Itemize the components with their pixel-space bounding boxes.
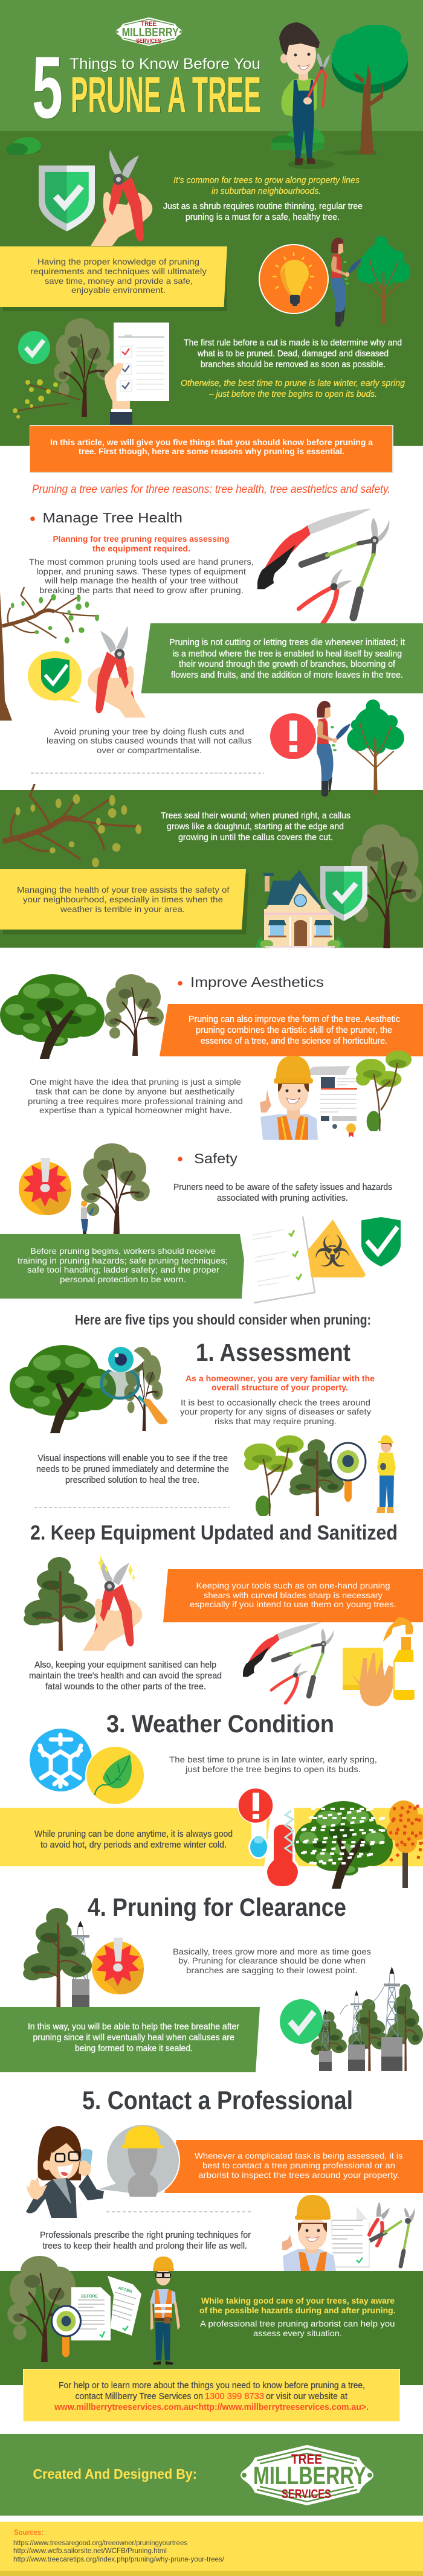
text: best time: just before the tree begins to open its buds. — [185, 1764, 361, 1774]
icon: branch with green leaves — [0, 587, 99, 721]
text: breathe: In this way, you will be able to help the tree breathe after — [28, 2022, 239, 2032]
illustration: worker in hard hat — [260, 1056, 318, 1140]
icon: magnifier with eye — [97, 1347, 167, 1424]
panel: credits — [0, 2434, 423, 2516]
text: weather band — [34, 1829, 233, 1850]
panel: weather band — [0, 1808, 423, 1866]
logo: Millberry Tree Services top — [115, 17, 182, 47]
icon: check circle 2 — [280, 1999, 323, 2044]
icon: branch with olive leaves — [3, 784, 141, 867]
text: clearance: by. Pruning for clearance should be done when — [178, 1956, 366, 1965]
text: assessment: As a homeowner, you are very familiar with the — [186, 1373, 375, 1383]
icon: before and after documents — [71, 2276, 141, 2340]
icon: before and after documents: BEFORE — [81, 2295, 98, 2299]
text: contact — [195, 2151, 402, 2180]
text: hazards: While taking good care of your trees, stay aware — [201, 2296, 395, 2305]
text: equipment: breaking the parts that need to grow after pruning. — [39, 585, 244, 595]
text: article intro: In this article, we will give you five things that you should know before pruning a — [50, 437, 373, 447]
text: expertise: pruning a tree requires more professional training and — [28, 1096, 243, 1106]
illustration: pylons and trees — [311, 1967, 423, 2071]
heading: five tips: Here are five tips you should consider when pruning: — [75, 1312, 371, 1328]
text: intro: pruning is a must for a safe, healthy tree. — [186, 212, 340, 222]
logo: Millberry Tree Services bottom: SERVICES — [282, 2487, 331, 2501]
icon: speech bubble with arborist silhouette — [95, 2124, 179, 2197]
panel: contact call to action — [23, 2369, 400, 2422]
icon: warning burst 2 — [92, 1938, 144, 1994]
icon: alert circle — [270, 713, 316, 759]
icon: biohazard sign — [308, 1219, 366, 1277]
heading: 3 weather condition: 3. Weather Condition — [106, 1710, 334, 1738]
text: expertise — [28, 1077, 243, 1115]
text: training: training in pruning hazards; safe pruning techniques; — [18, 1256, 228, 1265]
background: intro lawn — [0, 131, 423, 446]
icon: spray bottle, cloth and hand — [343, 1617, 415, 1706]
text: professionals — [40, 2230, 251, 2251]
heading: 4 pruning for clearance: 4. Pruning for Clearance — [88, 1893, 346, 1921]
background: closing hazards section — [0, 2271, 423, 2385]
text: contact details: For help or to learn more about the things you need to know before pruning a tree, — [59, 2380, 365, 2391]
text: first rule: Otherwise, the best time to prune is late winter, early spring — [181, 378, 405, 388]
logo: Millberry Tree Services top: SERVICES — [136, 38, 161, 45]
text: neighbourhood: Managing the health of your tree assists the safety of — [17, 885, 230, 895]
logo: Millberry Tree Services top: MILLBERRY — [122, 25, 179, 39]
panel: sharp tools — [163, 1569, 423, 1622]
text: assessment: your property for any signs of diseases or safety — [180, 1407, 371, 1416]
illustration: house — [256, 870, 344, 948]
text: three reasons: Pruning a tree varies for three reasons: tree health, tree aesthetics and safety. — [32, 483, 390, 496]
panel: breathe — [0, 2007, 260, 2072]
icon: olive tree safety — [81, 1143, 150, 1235]
text: trees seal: Trees seal their wound; when pruned right, a callus — [161, 811, 350, 821]
icon: oak tree — [0, 974, 105, 1059]
text: equipment: Planning for tree pruning requires assessing — [53, 534, 230, 544]
icon: autumn tree — [387, 1800, 423, 1888]
text: assessment: It is best to occasionally check the trees around — [181, 1398, 370, 1407]
text: first rule: branches should be removed as soon as possible. — [201, 359, 386, 370]
text: neighbourhood: weather is terrible in your area. — [60, 904, 185, 914]
icon: snowy tree — [294, 1801, 393, 1889]
heading: 5 contact a professional: 5. Contact a Professional — [82, 2086, 353, 2115]
text: training: personal protection to be worn. — [60, 1274, 186, 1284]
title numeral 5: 5 — [32, 38, 63, 137]
icon: sparkling pruners in hand — [83, 1558, 142, 1651]
text: best time — [169, 1755, 377, 1774]
text: training: Before pruning begins, workers should receive — [30, 1246, 216, 1256]
text: knowledge: Having the proper knowledge of pruning — [37, 257, 199, 266]
illustration: gardener with clippers — [279, 22, 335, 169]
panel: pruning explanation — [141, 623, 423, 693]
background: tree seal section — [0, 790, 423, 948]
icon: check circle — [18, 331, 50, 364]
text: article intro: tree. First though, here are some reasons why pruning is essential. — [79, 446, 344, 456]
text: clearance — [173, 1947, 371, 1975]
text: assessment: risks that may require pruning. — [215, 1416, 337, 1426]
text: weather band: to avoid hot, dry periods and extreme winter cold. — [40, 1840, 227, 1850]
text: safety intro: Pruners need to be aware of the safety issues and hazards — [173, 1182, 392, 1192]
icon: left bush — [3, 137, 41, 155]
icon: pruners and loppers — [369, 2202, 415, 2266]
text: sanitised: maintain the tree's health and can avoid the spread — [29, 1671, 222, 1681]
text: pruning explanation: flowers and fruits, and the addition of more leaves in the tree. — [171, 670, 403, 680]
text: pruning explanation: is a method where the tree is enabled to heal itself by sealing — [173, 649, 402, 659]
icon: lime tree — [356, 1050, 412, 1132]
panel: neighbourhood callout — [0, 869, 249, 934]
text: avoid flush cuts: over or compartmentalise. — [97, 745, 202, 755]
text: safety intro — [173, 1182, 392, 1203]
text: contact details: or visit our website at — [266, 2391, 348, 2401]
text: professionals: trees to keep their health and prolong their life as well. — [42, 2241, 247, 2251]
text: safety intro: associated with pruning activities. — [217, 1193, 348, 1203]
text: first rule: – just before the tree begins to open its buds. — [208, 389, 377, 399]
panel: sources — [0, 2522, 423, 2576]
heading: manage tree health: Manage Tree Health — [42, 510, 182, 525]
text: best time: The best time to prune is in late winter, early spring, — [169, 1755, 377, 1764]
text: intro — [163, 175, 363, 222]
text: avoid flush cuts: Avoid pruning your tree by doing flush cuts and — [54, 727, 244, 736]
text: contact details: 1300 399 8733 — [205, 2391, 264, 2401]
icon: warning burst — [19, 1158, 71, 1215]
icon: oak and olive trees — [10, 1345, 163, 1433]
icon: leaf — [86, 1746, 144, 1805]
text: hazards: A professional tree pruning arborist can help you — [200, 2319, 395, 2328]
icon: pruners in hand mirrored — [88, 626, 146, 718]
text: article intro — [50, 437, 373, 456]
text: first rule: The first rule before a cut is made is to determine why and — [184, 338, 402, 348]
text: assessment: prescribed solution to heal the tree. — [65, 1475, 199, 1485]
icon: cut branches — [13, 379, 80, 419]
text: pruning explanation: Pruning is not cutting or letting trees die whenever initiated; it — [169, 637, 405, 647]
text: pruning explanation: their wound through the growth of branches, blooming of — [179, 659, 396, 669]
illustration: worker and paperwork — [282, 2195, 370, 2271]
text: assessment: needs to be pruned immediately and determine the — [36, 1464, 229, 1474]
text: equipment: The most common pruning tools used are hand pruners, — [29, 557, 254, 567]
text: intro: It's common for trees to grow along property lines — [173, 175, 360, 185]
text: trees seal: grows like a doughnut, starting at the edge and — [167, 821, 344, 832]
icon: before and after documents: AFTER — [117, 2286, 132, 2295]
text: assessment: Visual inspections will enable you to see if the tree — [37, 1453, 228, 1463]
panel: aesthetics — [160, 1004, 423, 1056]
icon: shield with check — [39, 165, 95, 231]
text: sources: https://www.treesaregood.org/treeowner/pruningyourtrees — [13, 2539, 187, 2547]
icon: safety checklist — [251, 1216, 315, 1303]
text: clearance: Basically, trees grow more and more as time goes — [173, 1947, 371, 1956]
text: breathe: pruning since it will eventually heal when calluses are — [33, 2032, 234, 2043]
panel: article intro — [30, 425, 393, 473]
text: sharp tools: Keeping your tools such as on one-hand pruning — [196, 1581, 390, 1590]
icon: light bulb — [259, 245, 328, 313]
icon: olive tree beside oak — [105, 974, 164, 1056]
illustration: certificate — [308, 1066, 357, 1137]
text: hazards — [199, 2296, 395, 2338]
background: header sky — [0, 0, 423, 131]
logo: Millberry Tree Services bottom: MILLBERRY — [253, 2461, 366, 2490]
icon: thermometer hot — [266, 1811, 300, 1888]
icon: olive tree closing — [7, 2256, 79, 2362]
illustration: inspector — [376, 1435, 396, 1513]
illustration: woman on phone — [26, 2126, 104, 2218]
logo: Millberry Tree Services top: TREE — [141, 21, 157, 28]
text: aesthetics: essence of a tree, and the science of horticulture. — [201, 1036, 387, 1046]
text: intro: Just as a shrub requires routine thinning, regular tree — [163, 201, 363, 211]
logo: Millberry Tree Services bottom — [240, 2444, 374, 2506]
icon: biohazard sign: ☣ — [314, 1226, 351, 1277]
text: sources — [13, 2528, 225, 2563]
text: training — [18, 1246, 228, 1284]
text: hazards: of the possible hazards during and after pruning. — [199, 2305, 395, 2315]
text: avoid flush cuts: leaving on stubs caused wounds that will not callus — [47, 736, 251, 745]
text: trees seal: growing in until the callus covers the cut. — [178, 832, 333, 843]
heading: improve aesthetics: Improve Aesthetics — [190, 974, 324, 990]
text: neighbourhood: your neighbourhood, especially in times when the — [23, 895, 223, 904]
text: training: safe tool handling; ladder safety; and the proper — [27, 1265, 219, 1274]
illustration: woman pruning 2 — [317, 701, 350, 797]
icon: pruning tools small — [243, 1622, 334, 1703]
text: created and designed by: Created And Designed By: — [33, 2466, 197, 2482]
text: contact details: www.millberrytreeservices.com.au<http://www.millberrytreeservices.com.au>. — [54, 2402, 369, 2412]
text: expertise: task that can be done by anyone but aesthetically — [36, 1087, 234, 1096]
text: sources: http://www.wcfb.sailorsite.net/WCFB/Pruning.html — [13, 2546, 167, 2555]
icon: pine and pylon — [23, 1908, 92, 2007]
text: contact: arborist to inspect the trees around your property. — [198, 2170, 399, 2180]
text: expertise: One might have the idea that pruning is just a simple — [30, 1077, 241, 1087]
panel: training — [0, 1234, 244, 1299]
panel: contact — [164, 2140, 423, 2193]
icon: tree top right — [332, 25, 408, 155]
icon: small worker — [81, 1201, 94, 1237]
icon: hand with pruners — [91, 150, 152, 246]
icon: green shield — [361, 1217, 401, 1267]
text: equipment: the equipment required. — [92, 544, 190, 553]
text: knowledge — [30, 257, 207, 295]
icon: olive tree — [54, 318, 113, 417]
text: expertise: expertise than a typical homeowner might have. — [39, 1105, 232, 1115]
icon: checklist document in hand — [105, 323, 169, 425]
panel: knowledge callout — [0, 246, 227, 311]
text: sharp tools: especially if you intend to use them on young trees. — [190, 1599, 396, 1609]
text: contact: Whenever a complicated task is being assessed, it is — [195, 2151, 402, 2160]
title — [32, 38, 261, 137]
text: breathe — [28, 2022, 239, 2054]
icon: olive tree right — [349, 824, 422, 948]
text: first rule: what is to be pruned. Dead, damaged and diseased — [197, 348, 389, 359]
text: aesthetics: Pruning can also improve the form of the tree. Aesthetic — [189, 1014, 400, 1024]
text: professionals: Professionals prescribe the right pruning techniques for — [40, 2230, 251, 2240]
text: clearance: branches are sagging to their lowest point. — [186, 1965, 358, 1975]
text: trees seal — [161, 811, 350, 843]
text: weather band: While pruning can be done anytime, it is always good — [34, 1829, 233, 1839]
text: assessment — [36, 1373, 375, 1485]
text: contact: best to contact a tree pruning professional or an — [202, 2160, 395, 2170]
text: intro: in suburban neighbourhoods. — [212, 186, 321, 196]
text: knowledge: requirements and techniques will ultimately — [30, 266, 207, 276]
text: knowledge: save time, money and provide a safe, — [45, 276, 193, 286]
text: sanitised — [29, 1660, 222, 1692]
icon: magnifier — [52, 2306, 81, 2357]
icon: middle bush — [271, 127, 325, 153]
icon: pruning tools — [257, 509, 389, 628]
icon: thermometer alert — [238, 1788, 273, 1859]
icon: snowflake — [30, 1729, 92, 1791]
text: sharp tools — [190, 1581, 396, 1609]
text: sanitised: Also, keeping your equipment sanitised can help — [34, 1660, 216, 1670]
text: contact details: contact Millberry Tree Services on — [75, 2391, 203, 2401]
text: sources: http://www.treecaretips.org/index.php/pruning/why-prune-your-trees/ — [13, 2555, 225, 2563]
icon: pine tree — [24, 1557, 95, 1651]
text: sanitised: fatal wounds to the other parts of the tree. — [45, 1681, 206, 1692]
text: sources: Sources: — [14, 2528, 44, 2537]
text: pruning explanation — [169, 637, 405, 680]
text: aesthetics — [189, 1014, 400, 1046]
heading: safety — [178, 1151, 238, 1166]
text: breathe: being formed to make it sealed. — [75, 2043, 193, 2054]
text: assessment: overall structure of your property. — [212, 1383, 348, 1392]
icon: speech bubble shield — [28, 651, 82, 703]
icon: sparkles — [98, 1555, 135, 1582]
text: knowledge: enjoyable environment. — [71, 285, 166, 295]
illustration: woman pruning — [331, 238, 361, 327]
text: equipment — [29, 534, 254, 595]
title line 1: Things to Know Before You — [69, 56, 260, 72]
icon: inspected trees — [244, 1435, 344, 1517]
text: contact details — [54, 2380, 369, 2412]
text: equipment: lopper, and pruning saws. These types of equipment — [36, 567, 246, 576]
text: avoid flush cuts — [47, 727, 251, 755]
text: first rule — [181, 338, 405, 399]
icon: magnifier eye — [331, 1443, 366, 1502]
heading: safety: Safety — [194, 1151, 238, 1166]
illustration: arborist with goggles — [150, 2256, 180, 2365]
heading: 1 assessment: 1. Assessment — [196, 1338, 350, 1366]
text: sharp tools: shears with curved blades sharp is necessary — [204, 1590, 383, 1600]
icon: shield over house — [320, 866, 367, 921]
icon: green tree 2 — [347, 699, 404, 794]
text: neighbourhood — [17, 885, 230, 914]
text: equipment: will help manage the health of your tree without — [44, 576, 238, 585]
text: hazards: assess every situation. — [253, 2328, 342, 2338]
text: aesthetics: pruning combines the artistic skill of the pruner, the — [196, 1025, 392, 1035]
logo: Millberry Tree Services bottom: TREE — [291, 2452, 322, 2467]
icon: green tree — [357, 236, 410, 324]
